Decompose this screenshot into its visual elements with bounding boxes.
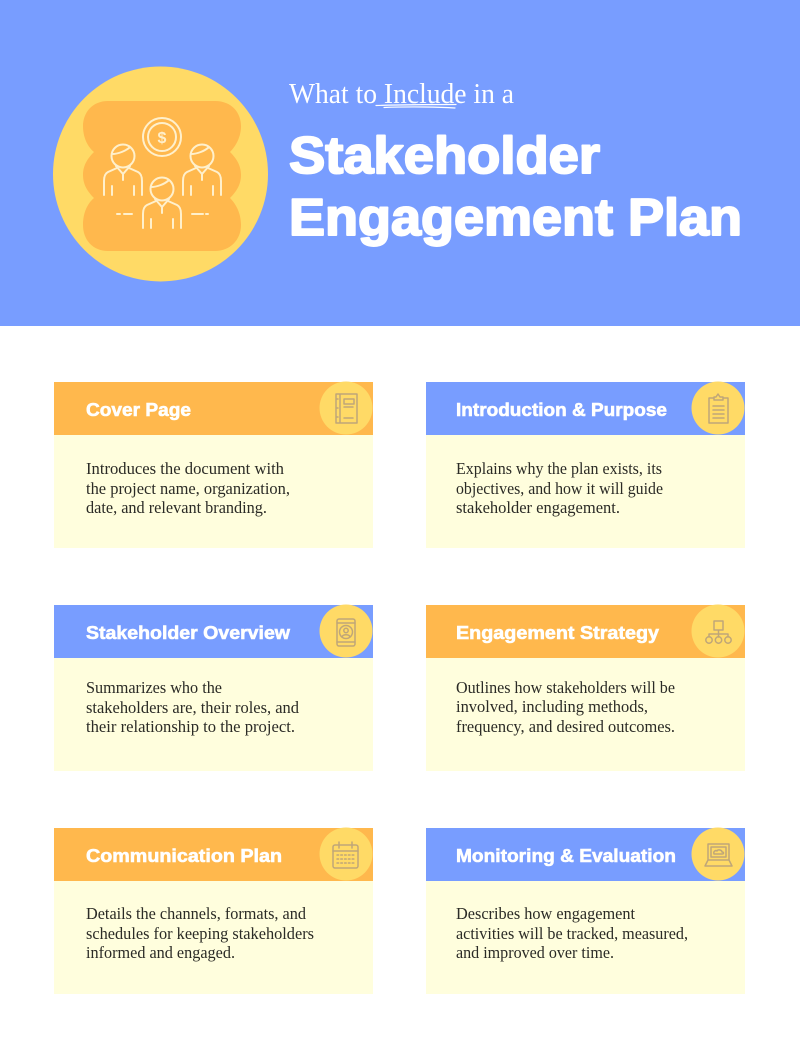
header band [0, 0, 800, 326]
panel: Communication Plan [54, 828, 373, 994]
panel: Stakeholder Overview [54, 604, 373, 771]
card header [426, 382, 745, 435]
card body [426, 382, 745, 548]
body text [456, 904, 688, 962]
body text: stakeholder engagement. [456, 498, 620, 517]
body text: schedules for keeping stakeholders [86, 924, 314, 943]
heading: Communication Plan [86, 845, 282, 866]
card header [54, 605, 373, 658]
body text: involved, including methods, [456, 697, 648, 716]
body text: Explains why the plan exists, its [456, 459, 662, 478]
icon: profile on tablet [320, 604, 372, 658]
panel: Monitoring & Evaluation [426, 828, 745, 994]
body text: Details the channels, formats, and [86, 904, 307, 923]
icon: person centre [143, 178, 181, 228]
body text: Summarizes who the [86, 678, 222, 697]
body text: informed and engaged. [86, 943, 235, 962]
icon: person right [183, 144, 221, 195]
heading: Introduction & Purpose [456, 399, 667, 420]
body text: stakeholders are, their roles, and [86, 698, 300, 717]
card body [54, 382, 373, 548]
body text [456, 459, 663, 517]
body text: objectives, and how it will guide [456, 479, 663, 498]
title: Engagement Plan [289, 189, 742, 247]
icon: clipboard [692, 382, 744, 434]
connecting dashes [117, 213, 208, 215]
heading: Stakeholder Overview [86, 622, 291, 643]
body text: the project name, organization, [86, 479, 290, 498]
panel: Introduction & Purpose [426, 382, 745, 548]
body text: activities will be tracked, measured, [456, 924, 688, 943]
body text [86, 904, 314, 962]
subtitle scribble underline [376, 104, 456, 108]
body text [456, 678, 675, 736]
title [289, 127, 742, 247]
body text: date, and relevant branding. [86, 498, 267, 517]
body text [86, 678, 300, 736]
card body [426, 828, 745, 994]
hero orange blob [83, 101, 241, 251]
body text [86, 459, 290, 517]
body text: their relationship to the project. [86, 717, 295, 736]
body text: Describes how engagement [456, 904, 635, 923]
card header [426, 605, 745, 658]
icon: dollar coin: $ [158, 130, 167, 147]
icon: org chart [692, 604, 744, 658]
card header [54, 382, 373, 435]
heading: Engagement Strategy [456, 622, 660, 643]
panel: Cover Page [54, 382, 373, 548]
card body [426, 605, 745, 771]
heading: Monitoring & Evaluation [456, 845, 676, 866]
icon: notebook [320, 382, 372, 434]
body text: frequency, and desired outcomes. [456, 717, 675, 736]
card header [426, 828, 745, 881]
icon: calendar [320, 828, 372, 880]
title: Stakeholder [289, 127, 600, 185]
heading: Cover Page [86, 399, 191, 420]
card header [54, 828, 373, 881]
icon: laptop with cloud [692, 828, 744, 880]
icon: person left [104, 144, 142, 195]
body text: and improved over time. [456, 943, 614, 962]
body text: Introduces the document with [86, 459, 285, 478]
icon: dollar coin [143, 118, 181, 156]
panel: Engagement Strategy [426, 604, 745, 771]
hero yellow circle [53, 66, 268, 282]
subtitle: What to Include in a [289, 79, 515, 110]
card body [54, 605, 373, 771]
card body [54, 828, 373, 994]
body text: Outlines how stakeholders will be [456, 678, 675, 697]
hero illustration: stakeholders around a coin [53, 66, 268, 282]
